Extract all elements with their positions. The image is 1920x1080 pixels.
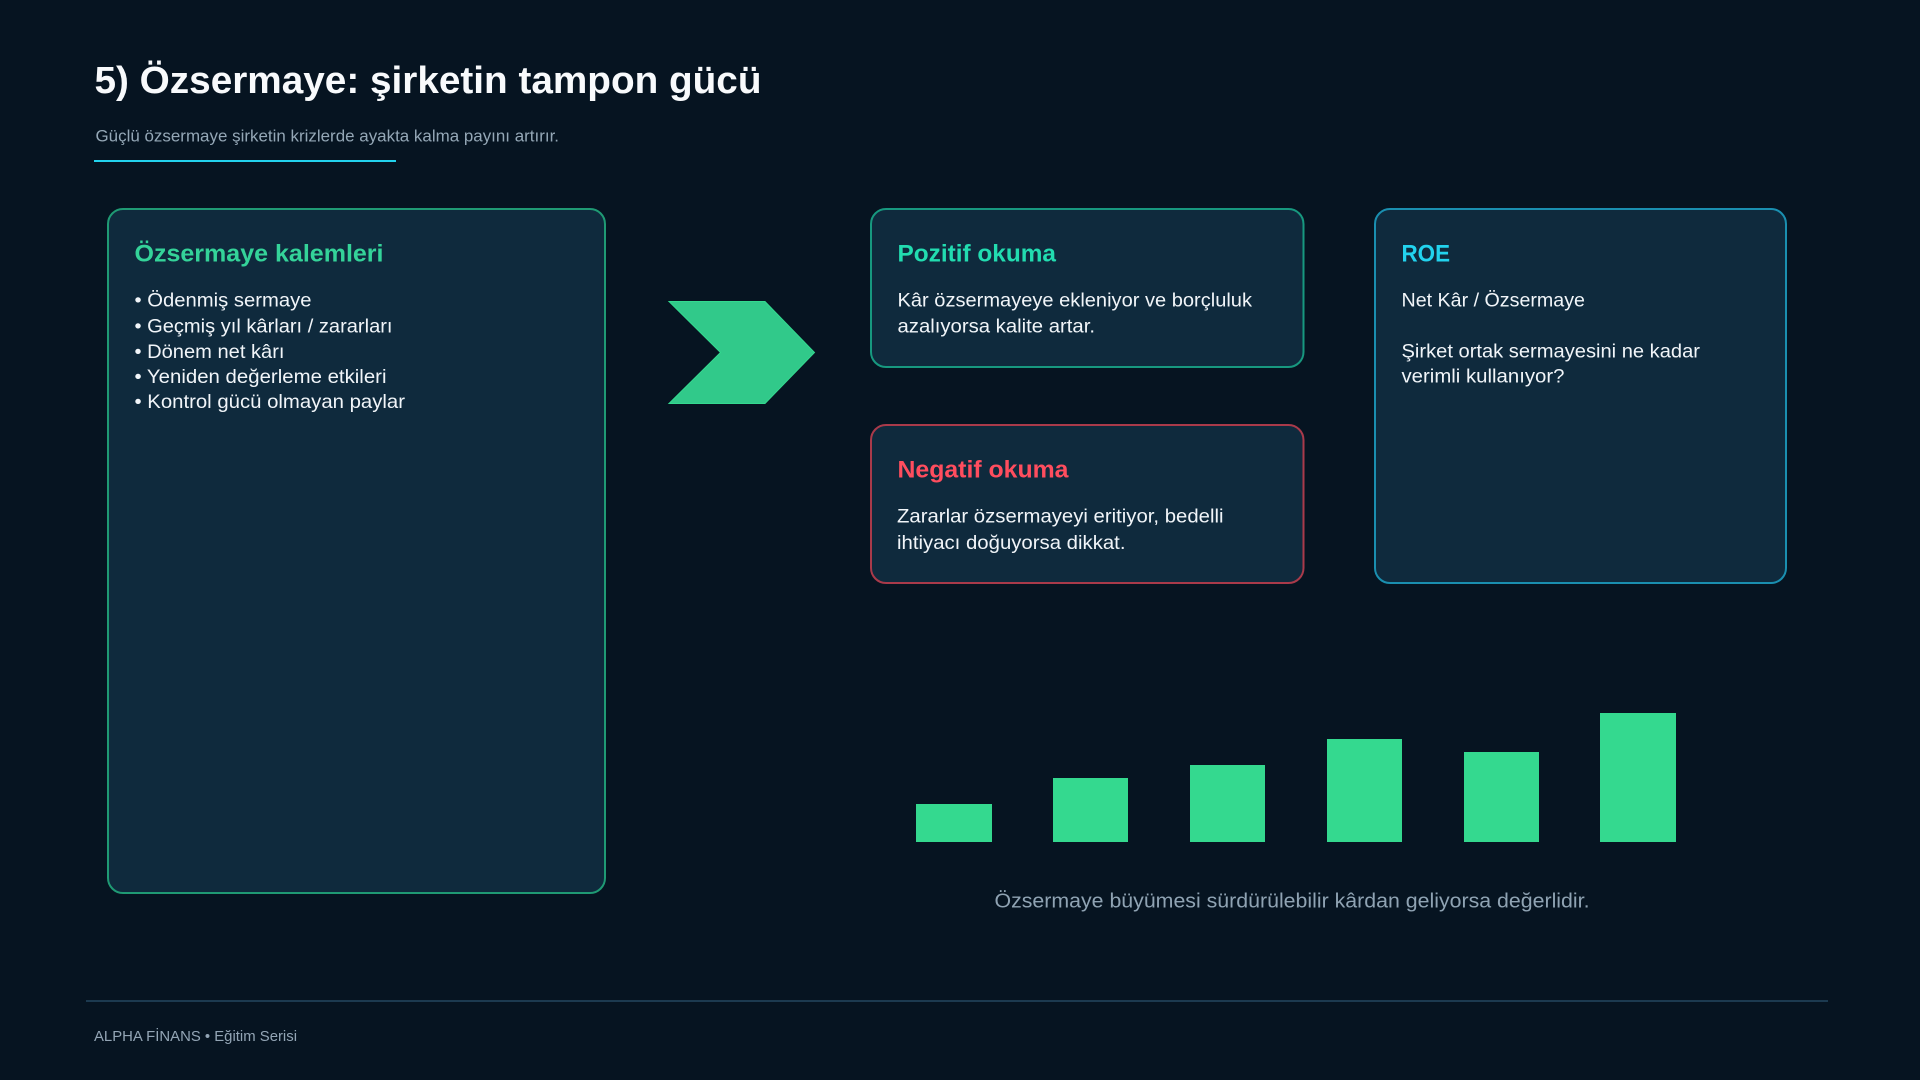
- list: özsermaye items: • Yeniden değerleme etkileri: [134, 366, 386, 388]
- text: pozitif okuma body: azalıyorsa kalite artar.: [898, 316, 1095, 338]
- panel: negatif okuma: [871, 425, 1304, 583]
- text: pozitif okuma body: [898, 290, 1252, 338]
- list: özsermaye items: • Dönem net kârı: [134, 341, 284, 363]
- list: özsermaye items: • Geçmiş yıl kârları / zararları: [134, 316, 392, 338]
- list: özsermaye items: • Ödenmiş sermaye: [134, 290, 312, 312]
- panel: özsermaye kalemleri: [108, 209, 605, 893]
- text: negatif okuma body: [897, 506, 1224, 554]
- list: özsermaye items: • Kontrol gücü olmayan paylar: [134, 391, 406, 413]
- heading: negatif okuma: Negatif okuma: [898, 456, 1069, 484]
- text: roe question: verimli kullanıyor?: [1402, 366, 1565, 388]
- heading: pozitif okuma: Pozitif okuma: [898, 240, 1057, 268]
- panel: roe: [1375, 209, 1786, 583]
- text: roe formula: Net Kâr / Özsermaye: [1402, 290, 1585, 312]
- list: özsermaye items: [134, 290, 406, 413]
- title: 5) Özsermaye: şirketin tampon gücü: [94, 59, 762, 102]
- footer text: ALPHA FİNANS • Eğitim Serisi: [94, 1027, 297, 1045]
- title accent underline: [94, 160, 396, 162]
- footer divider: [86, 1000, 1828, 1002]
- subtitle: Güçlü özsermaye şirketin krizlerde ayakta kalma payını artırır.: [96, 128, 559, 146]
- bar chart: [916, 713, 1676, 842]
- heading: roe: ROE: [1402, 240, 1450, 268]
- text: negatif okuma body: ihtiyacı doğuyorsa dikkat.: [897, 532, 1126, 554]
- panel: pozitif okuma: [871, 209, 1304, 367]
- text: negatif okuma body: Zararlar özsermayeyi eritiyor, bedelli: [897, 506, 1224, 528]
- chart caption: Özsermaye büyümesi sürdürülebilir kârdan geliyorsa değerlidir.: [994, 890, 1590, 912]
- text: pozitif okuma body: Kâr özsermayeye ekleniyor ve borçluluk: [898, 290, 1252, 312]
- arrow: chevron: [669, 302, 814, 404]
- heading: özsermaye kalemleri: Özsermaye kalemleri: [134, 240, 384, 268]
- text: roe question: Şirket ortak sermayesini ne kadar: [1402, 340, 1701, 362]
- text: roe question: [1402, 340, 1701, 388]
